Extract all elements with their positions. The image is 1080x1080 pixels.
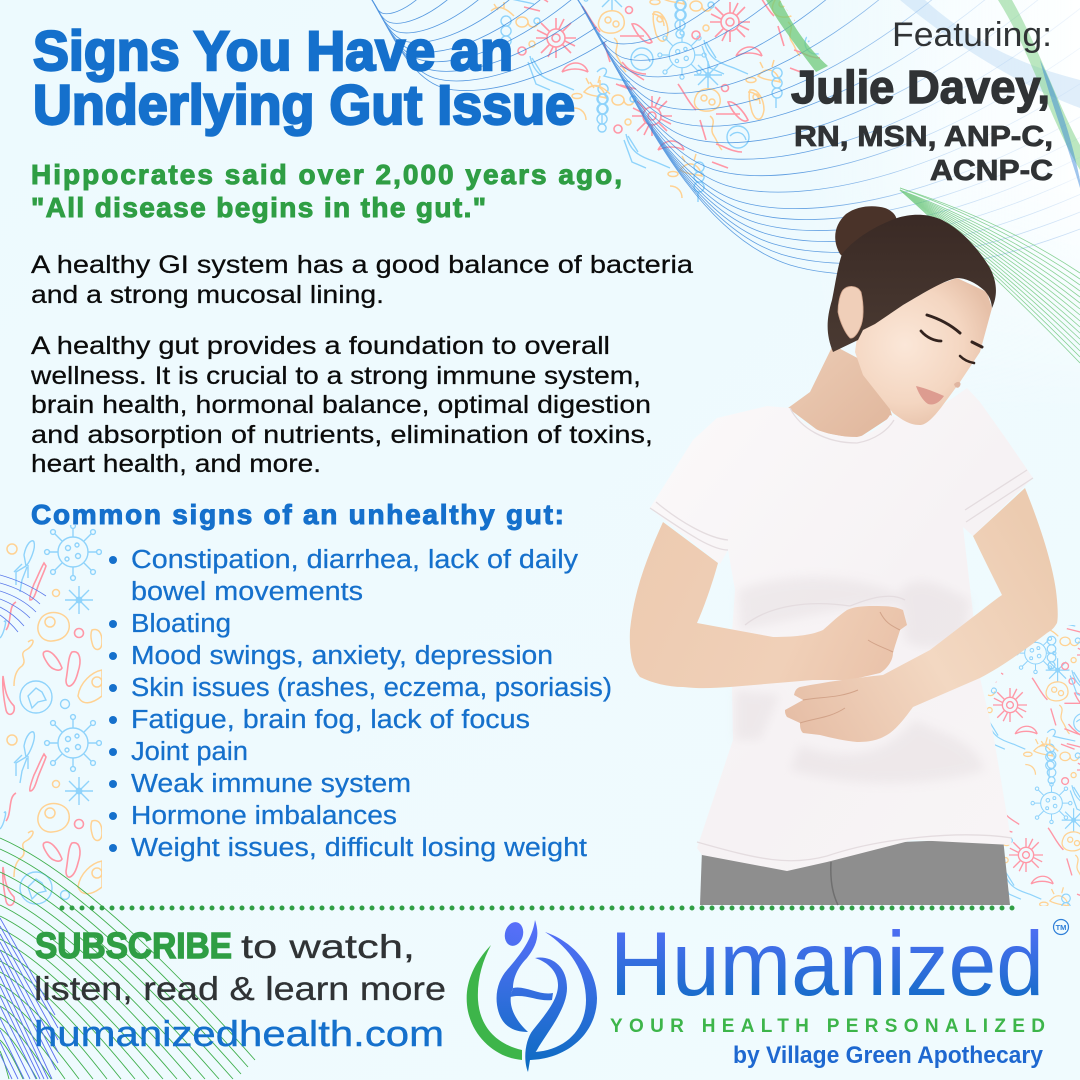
blue lines left [0, 575, 46, 632]
neck [788, 345, 892, 439]
logo: by Village Green Apothecary [733, 1042, 1044, 1069]
body paragraph 2: wellness. It is crucial to a strong immune system, [30, 362, 641, 390]
hair [828, 206, 996, 352]
body paragraph 1: A healthy GI system has a good balance of bacteria [31, 251, 693, 279]
blue line fan bottom left [0, 918, 58, 1079]
bullets [109, 556, 117, 852]
jeans [700, 838, 1010, 905]
logo: Humanized [610, 914, 1044, 1015]
body paragraph 2 [30, 332, 653, 478]
woman holding stomach [630, 206, 1058, 905]
list of signs: Mood swings, anxiety, depression [131, 642, 553, 670]
logo icon [467, 920, 597, 1072]
wave line fan: upper middle [372, 0, 607, 91]
featuring credit: Featuring: [892, 16, 1052, 54]
featuring credit: Julie Davey, [791, 61, 1050, 113]
left arm [630, 522, 907, 688]
wave line fan: right sweep [578, 0, 1080, 274]
list of signs: Constipation, diarrhea, lack of daily [131, 546, 578, 574]
list of signs: Joint pain [131, 738, 248, 766]
list of signs [109, 546, 612, 862]
subscribe call to action: listen, read & learn more [34, 970, 446, 1007]
dotted divider [62, 906, 1013, 910]
eyes and brows [921, 315, 982, 363]
list of signs: Bloating [131, 610, 231, 638]
green line fan bottom left [0, 838, 255, 1079]
title [33, 19, 575, 136]
green and blue bands top right [766, 0, 1080, 188]
list of signs: Fatigue, brain fog, lack of focus [131, 706, 530, 734]
face and head skin [855, 278, 992, 425]
subscribe call to action [34, 925, 446, 1054]
subtitle: Hippocrates quote: Hippocrates said over 2,000 years ago, [31, 159, 622, 190]
right arm and hand [785, 488, 1058, 742]
shirt soft shading [735, 577, 985, 783]
microbe pattern: bottom right [987, 625, 1080, 906]
subscribe call to action: to watch, [241, 928, 415, 965]
logo: YOUR HEALTH PERSONALIZED [610, 1016, 1045, 1037]
trademark [1054, 920, 1068, 934]
subscribe call to action: humanizedhealth.com [34, 1013, 444, 1054]
trademark: TM [1056, 923, 1066, 932]
microbe pattern: top center [491, 0, 842, 202]
title: Signs You Have an [33, 19, 513, 82]
featuring credit: ACNP-C [930, 155, 1053, 187]
mouth [916, 386, 944, 405]
hand details [800, 612, 900, 723]
green line fan right of head [900, 188, 1080, 363]
pale wash fading wave lines at top right [812, 0, 1080, 286]
body paragraph 2: A healthy gut provides a foundation to overall [31, 332, 610, 360]
featuring credit: RN, MSN, ANP-C, [794, 121, 1053, 153]
list of signs: bowel movements [131, 578, 363, 606]
shirt seams [650, 408, 1033, 861]
title: Underlying Gut Issue [33, 73, 575, 136]
body paragraph 2: brain health, hormonal balance, optimal digestion [31, 391, 651, 419]
heading: common signs: Common signs of an unhealthy gut: [31, 499, 564, 530]
body paragraph 2: heart health, and more. [31, 450, 321, 478]
list of signs: Weak immune system [131, 770, 411, 798]
logo [467, 914, 1068, 1072]
featuring credit [791, 16, 1053, 187]
t-shirt [650, 388, 1033, 871]
body paragraph 2: and absorption of nutrients, elimination of toxins, [31, 421, 653, 449]
nose shadow [954, 382, 961, 388]
subtitle: Hippocrates quote: "All disease begins in the gut." [31, 192, 486, 223]
microbe pattern: left strip [0, 524, 102, 905]
list of signs: Skin issues (rashes, eczema, psoriasis) [131, 674, 612, 702]
subscribe call to action: SUBSCRIBE [35, 925, 232, 966]
jeans seam [831, 862, 838, 905]
subtitle: Hippocrates quote [31, 159, 622, 223]
list of signs: Hormone imbalances [131, 802, 397, 830]
body paragraph 1: and a strong mucosal lining. [31, 281, 384, 309]
list of signs: Weight issues, difficult losing weight [131, 834, 587, 862]
hair bun [835, 206, 897, 256]
hair main [828, 215, 996, 352]
body paragraph 1 [31, 251, 693, 309]
ear [838, 286, 863, 338]
